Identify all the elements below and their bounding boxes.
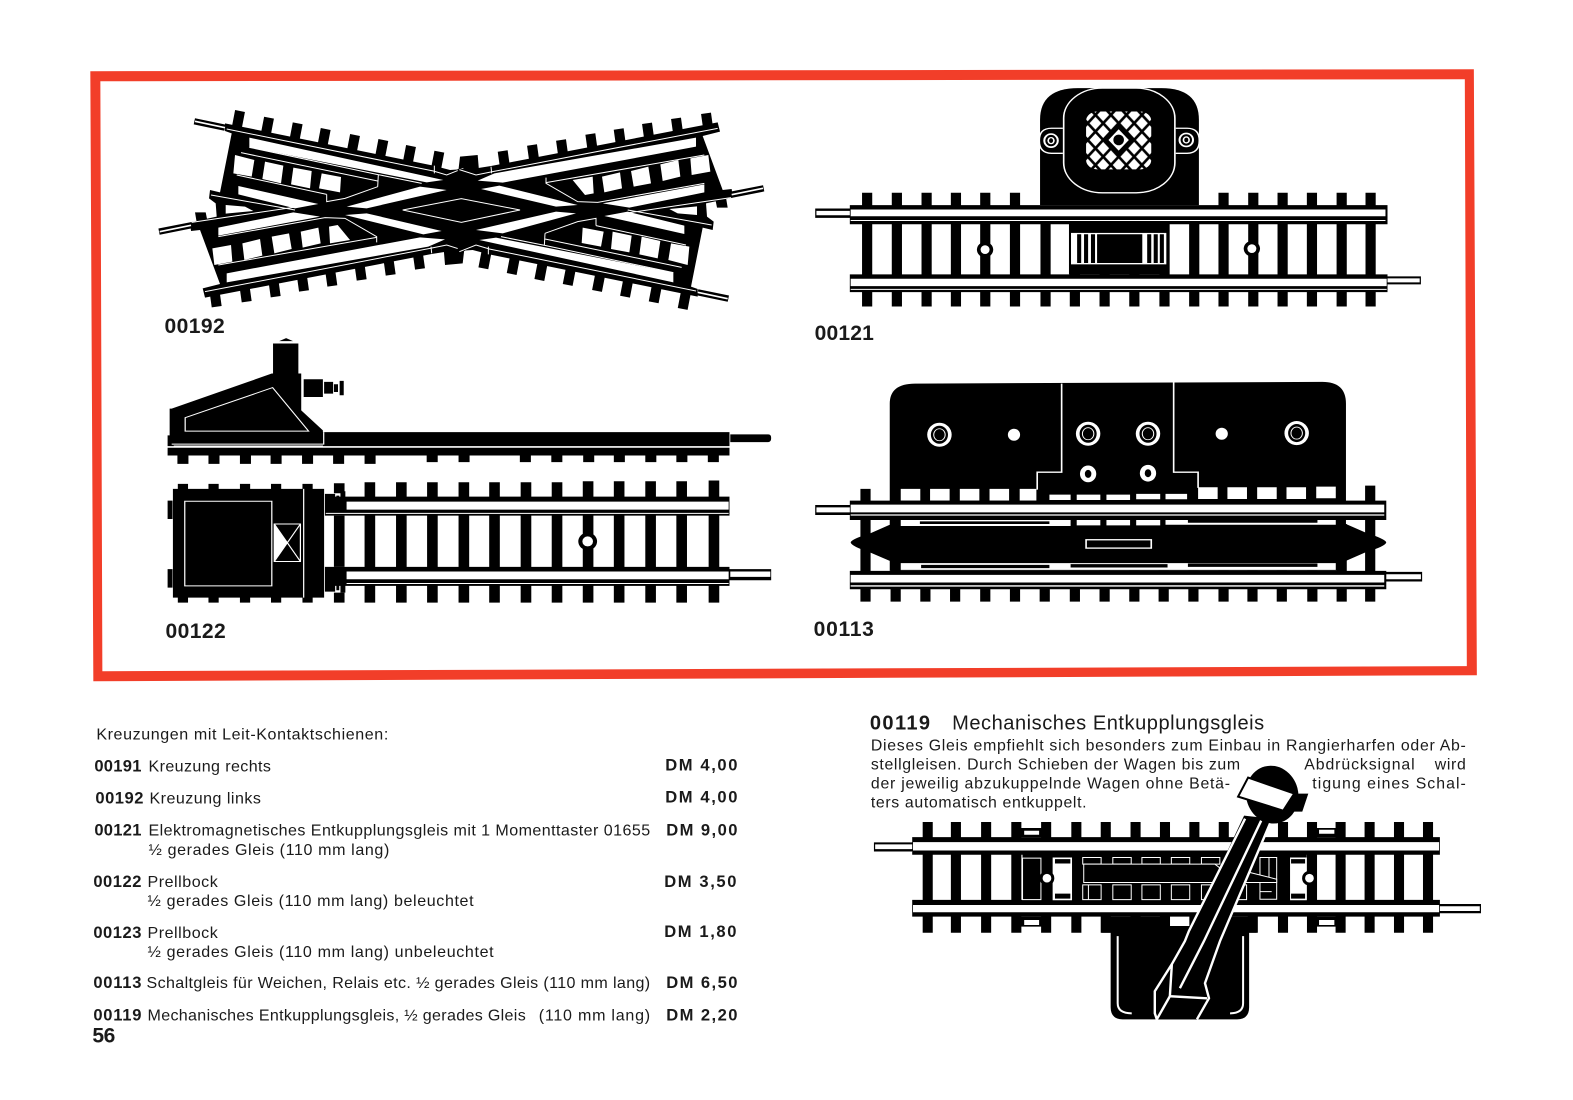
description text: Dieses Gleis empfiehlt sich besonders zum Einbau in Rangierharfen oder Ab- <box>871 737 1466 754</box>
track illustration: 00119 mechanical uncoupling <box>874 760 1481 1019</box>
price row 00192: Kreuzung links <box>150 790 261 808</box>
price row 00119: Mechanisches Entkupplungsgleis, ½ gerades Gleis <box>148 1006 526 1024</box>
contact box <box>890 382 1346 502</box>
description text: der jeweilig abzukuppelnde Wagen ohne Betä- <box>871 776 1230 793</box>
price row 00121: Elektromagnetisches Entkupplungsgleis mit 1 Momenttaster 01655 <box>149 822 650 840</box>
description text: ters automatisch entkuppelt. <box>871 795 1087 812</box>
price row 00113: 00113 <box>93 973 141 992</box>
center contact bar <box>851 520 1386 571</box>
page number: 56 <box>92 1024 115 1047</box>
label: 00192: 00192 <box>165 315 225 338</box>
description text: tigung eines Schal- <box>1312 776 1466 793</box>
track illustration: 00122 buffer stop <box>168 338 771 603</box>
label: 00121: 00121 <box>815 322 874 345</box>
price row 00192: DM 4,00 <box>665 788 737 807</box>
price row 00123: Prellbock <box>148 924 219 942</box>
center diamond <box>403 199 520 222</box>
track illustration: 00113 switching track <box>815 382 1422 602</box>
description text: Abdrücksignal <box>1304 757 1415 774</box>
price row 00122: ½ gerades Gleis (110 mm lang) beleuchtet <box>148 892 474 910</box>
price row 00122 <box>93 872 736 910</box>
price row 00121 <box>94 821 737 859</box>
price row 00119: 00119 <box>93 1005 141 1024</box>
price row 00119: DM 2,20 <box>666 1005 737 1024</box>
price row 00119 <box>93 1005 737 1024</box>
magnet box <box>1040 88 1199 205</box>
price row 00119: (110 mm lang) <box>539 1006 650 1024</box>
price row 00191: 00191 <box>94 757 141 776</box>
price row 00191 <box>94 756 737 776</box>
track illustration: 00192 crossing <box>159 111 764 309</box>
price row 00191: DM 4,00 <box>665 756 737 775</box>
description text <box>871 737 1466 812</box>
rails <box>815 205 1421 292</box>
description text: stellgleisen. Durch Schieben der Wagen bis zum <box>871 757 1240 774</box>
price row 00121: ½ gerades Gleis (110 mm lang) <box>149 841 389 859</box>
description text: wird <box>1434 757 1466 774</box>
price row 00191: Kreuzung rechts <box>149 758 271 776</box>
price row 00123: DM 1,80 <box>664 922 736 941</box>
label: 00122: 00122 <box>166 620 226 643</box>
heading: 00119: Mechanisches Entkupplungsgleis <box>952 712 1264 734</box>
price row 00121: 00121 <box>94 821 141 840</box>
lever <box>1155 816 1271 1019</box>
top view <box>168 481 771 603</box>
list intro text: Kreuzungen mit Leit-Kontaktschienen: <box>96 725 388 743</box>
mechanism <box>1023 854 1317 902</box>
signal disc <box>1238 760 1308 829</box>
price row 00123: 00123 <box>93 923 141 942</box>
magnet coil <box>1069 224 1170 274</box>
price row 00122: DM 3,50 <box>664 872 736 891</box>
price row 00192: 00192 <box>95 789 143 808</box>
price row 00121: DM 9,00 <box>666 821 737 840</box>
heading: 00119: 00119 <box>870 712 930 734</box>
price row 00113: DM 6,50 <box>666 973 737 992</box>
price row 00192 <box>95 788 737 808</box>
price row 00113: Schaltgleis für Weichen, Relais etc. ½ gerades Gleis (110 mm lang) <box>147 974 650 992</box>
panel: red frame <box>90 69 1477 681</box>
price row 00122: 00122 <box>93 872 141 891</box>
price row 00123: ½ gerades Gleis (110 mm lang) unbeleuchtet <box>148 943 494 961</box>
side view <box>168 338 771 464</box>
track illustration: 00121 electromagnetic uncoupling <box>815 88 1421 306</box>
lower box <box>1111 926 1249 1019</box>
price row 00122: Prellbock <box>148 873 219 891</box>
rails <box>815 501 1422 589</box>
label: 00113: 00113 <box>814 618 874 641</box>
price row 00123 <box>93 922 736 961</box>
